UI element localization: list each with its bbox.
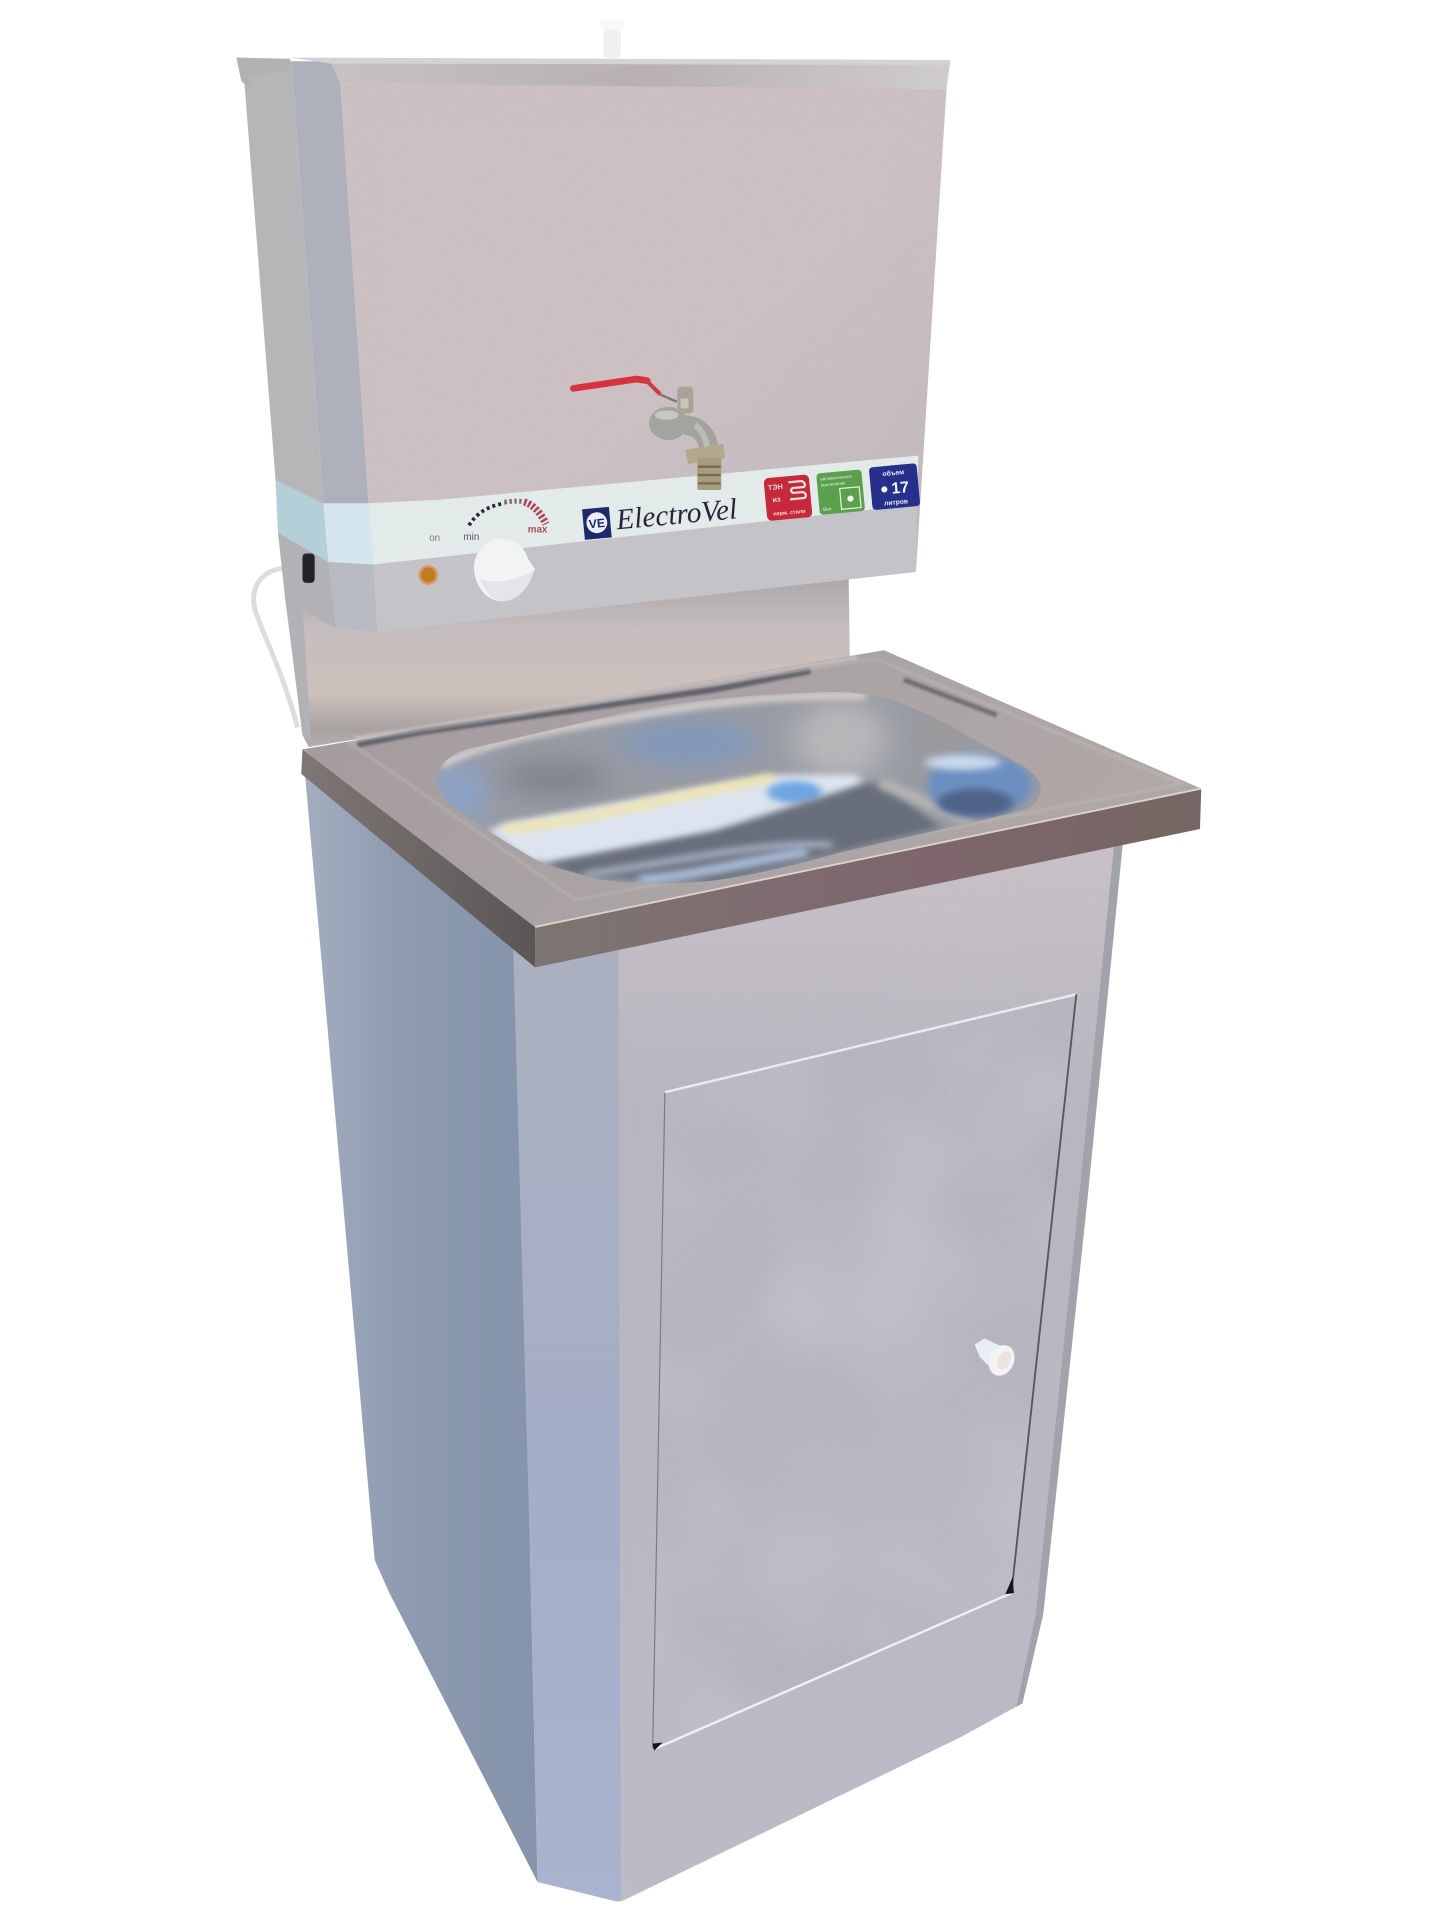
tap with red lever: [573, 379, 725, 490]
badge: volume 17 litres: 17: [891, 479, 910, 498]
badge: automatic switch: выключение: [821, 480, 846, 488]
basin bowl: [437, 692, 1041, 884]
ridge: [879, 782, 971, 822]
lid: [236, 58, 950, 89]
temperature dial scale: [429, 501, 548, 544]
cabinet left side: [304, 759, 538, 1882]
badge: automatic switch: [816, 469, 865, 515]
badge: volume 17 litres: [869, 463, 920, 510]
right blue reflection: [927, 755, 1032, 815]
front lip: [535, 789, 1201, 967]
sink top surface: [302, 650, 1201, 927]
back rim groove: [358, 671, 811, 744]
back wall reflections: [428, 761, 487, 824]
badge: volume 17 litres: литров: [884, 498, 908, 507]
badge: heating element: из: [772, 494, 781, 504]
splashback panel: [285, 569, 850, 747]
badge: automatic switch: автоматическое: [820, 474, 853, 482]
cabinet corner chamfer: [513, 943, 626, 1902]
white label band: [276, 456, 918, 564]
door knob: [975, 1338, 1019, 1380]
thermostat knob: [474, 539, 535, 601]
brand logo: ElectroVel: [614, 493, 739, 537]
rim highlight: [441, 695, 866, 766]
power cord connector: [302, 553, 315, 583]
badge: heating element: ТЭН: [767, 482, 783, 492]
water tank: [236, 20, 953, 634]
top filler cap knob: [600, 20, 624, 59]
badge: heating element: нерж. стали: [773, 509, 806, 518]
temperature dial scale: on: [429, 533, 440, 544]
front lower panel: [373, 504, 917, 632]
badge: automatic switch: Вкл: [823, 506, 832, 513]
stainless sink: [301, 650, 1201, 967]
tank chamfer face: [291, 61, 377, 632]
cabinet: [304, 759, 1139, 1910]
indicator lamp: [420, 566, 437, 584]
cabinet front face: [612, 833, 1139, 1910]
badge: heating element: [763, 474, 813, 521]
dark floor: [546, 782, 942, 884]
temperature dial scale: max: [528, 525, 548, 536]
badge: volume 17 litres: объем: [882, 468, 904, 478]
left lip: [301, 749, 535, 967]
tank front face: [340, 83, 947, 632]
floor highlight: [487, 775, 862, 862]
tank side face: [244, 61, 336, 628]
power cord: [254, 568, 302, 727]
product illustration: washbasin with water heater: [236, 29, 1202, 1902]
back rim highlight: [355, 658, 857, 738]
sink rim outline: [349, 659, 1182, 900]
brand logo: VE: [588, 516, 606, 531]
temperature dial scale: min: [464, 532, 479, 543]
door panel: [649, 986, 1084, 1757]
